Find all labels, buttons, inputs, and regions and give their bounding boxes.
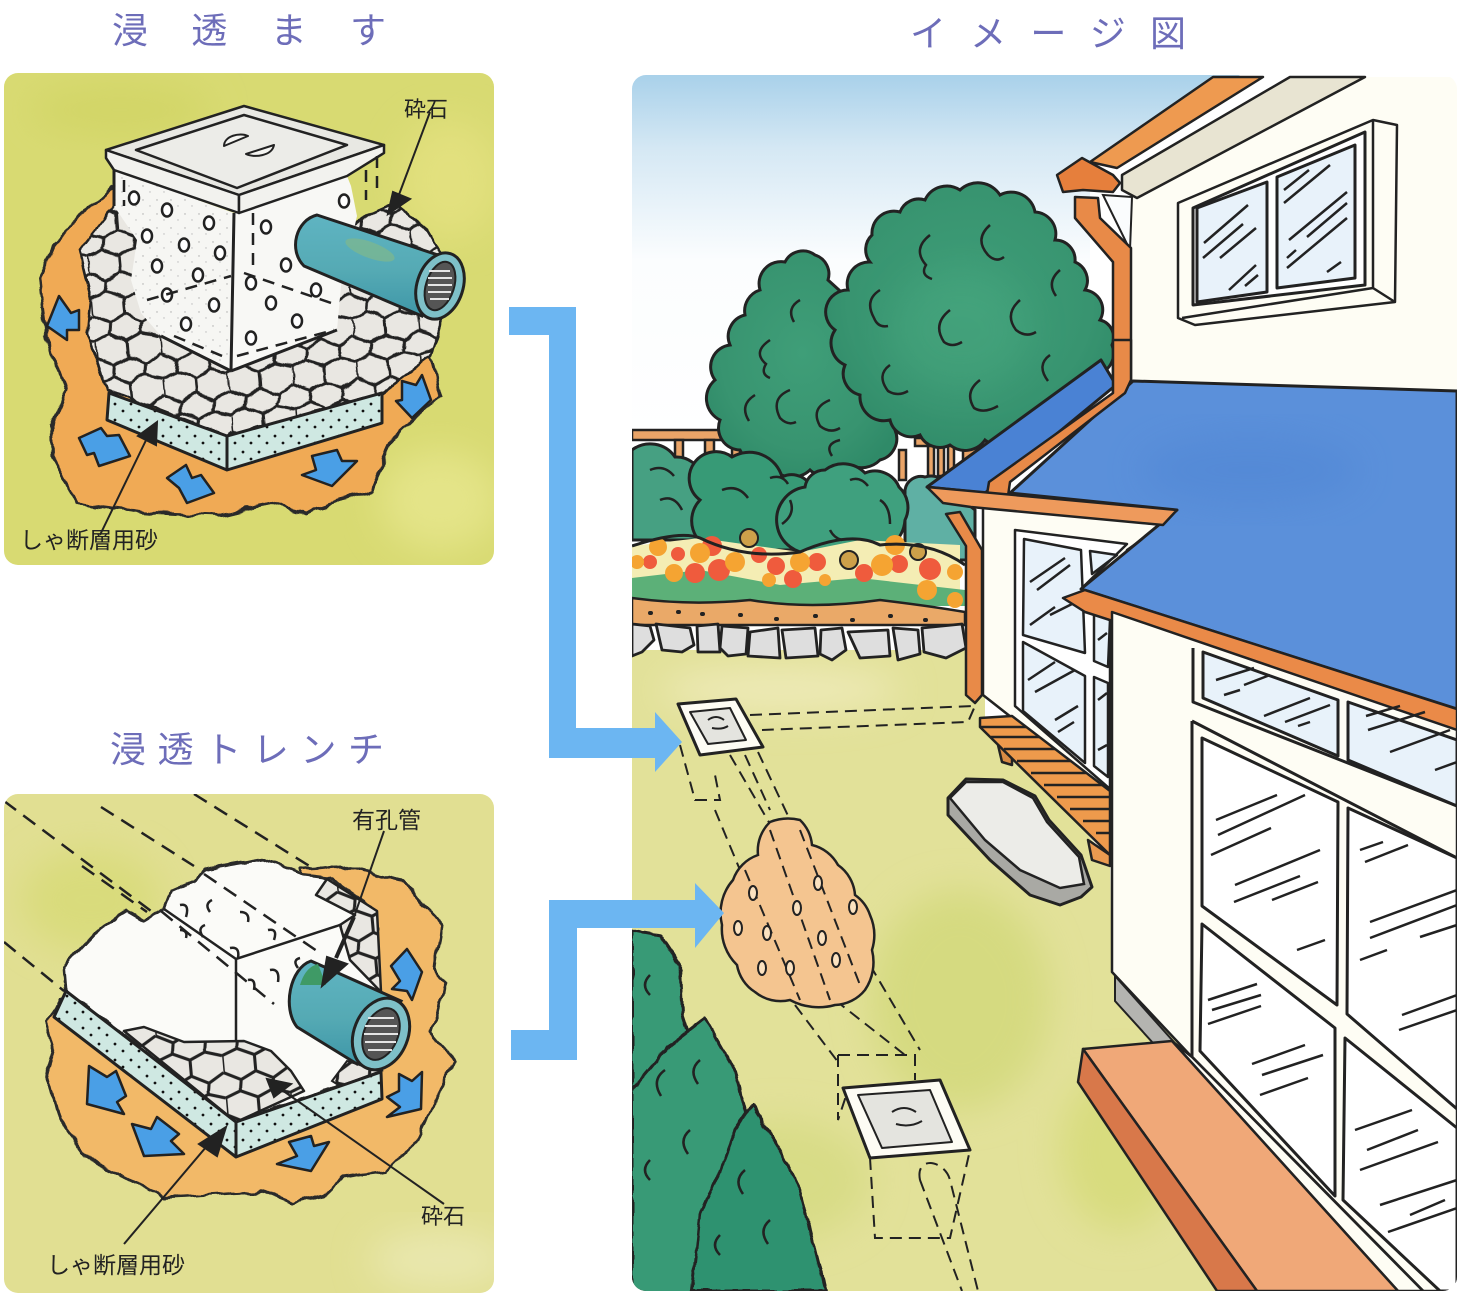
upper window [1178,120,1397,325]
sky [632,75,1240,248]
main wall [1112,612,1457,1291]
deck [980,716,1110,866]
arrows: seepage [47,296,431,503]
pipe [296,215,472,325]
excavated ground [39,186,441,516]
perforated box [106,106,384,371]
step [1078,1041,1398,1291]
lower-left wall [983,505,1163,795]
garden stone [948,779,1092,905]
crushed stone fill [79,203,445,436]
label: 砕石: 砕石 [404,97,448,122]
blue roof: side [927,360,1116,493]
large windows [1192,648,1457,1291]
arrow: from 浸透トレンチ to image [511,883,724,1060]
dashed buried pipe [680,706,978,1291]
window sill strip [1172,1041,1423,1291]
downspout: upper [1075,197,1131,395]
front eave [1063,590,1457,732]
upper house wall [1132,77,1457,392]
foreground conifers [632,930,825,1295]
tree: rear [706,251,898,477]
label: しゃ断層用砂: しゃ断層用砂 [20,527,158,553]
leader lines [100,112,430,535]
sand layer [54,991,382,1157]
arrows: seepage [87,949,422,1171]
stone wall [632,624,966,660]
panel: 浸透トレンチ diagram [4,794,510,1293]
panel: 浸透ます diagram [4,73,500,565]
title: イメージ図: イメージ図 [910,13,1186,54]
lawn [632,650,1216,1291]
roof shading [1140,435,1360,505]
white gable soffit [1103,195,1132,250]
trench gravel patch [721,819,874,1007]
side eave [927,487,1177,525]
label: 砕石: 砕石 [421,1204,465,1229]
side windows [1015,530,1127,789]
infiltration inlet: lower [843,1080,970,1158]
title: 浸透ます: 浸透ます [112,10,386,51]
flower bed [630,529,965,608]
diagonal gutter [987,340,1131,496]
label: 有孔管: 有孔管 [352,807,421,833]
pipe [289,961,420,1078]
arrow: from 浸透ます to image [509,307,682,772]
excavated ground [47,866,454,1204]
label: しゃ断層用砂: しゃ断層用砂 [47,1252,185,1278]
sand layer [107,393,382,470]
trench edges [164,908,341,1040]
infiltration inlet: upper [678,699,763,755]
foundation [1115,976,1173,1043]
leader lines [124,831,444,1244]
soil [632,598,965,625]
hedge bushes [632,444,975,560]
upper eaves [1057,77,1365,198]
dashed trench lines [4,794,317,1004]
lower downspout [946,512,982,703]
trench white body [64,859,381,1122]
blue roof: main [1010,381,1457,709]
crushed stone [124,1027,304,1122]
fence [632,425,977,480]
tree: front [826,183,1114,450]
title: 浸透トレンチ: 浸透トレンチ [110,729,384,770]
panel: image illustration [630,75,1457,1295]
